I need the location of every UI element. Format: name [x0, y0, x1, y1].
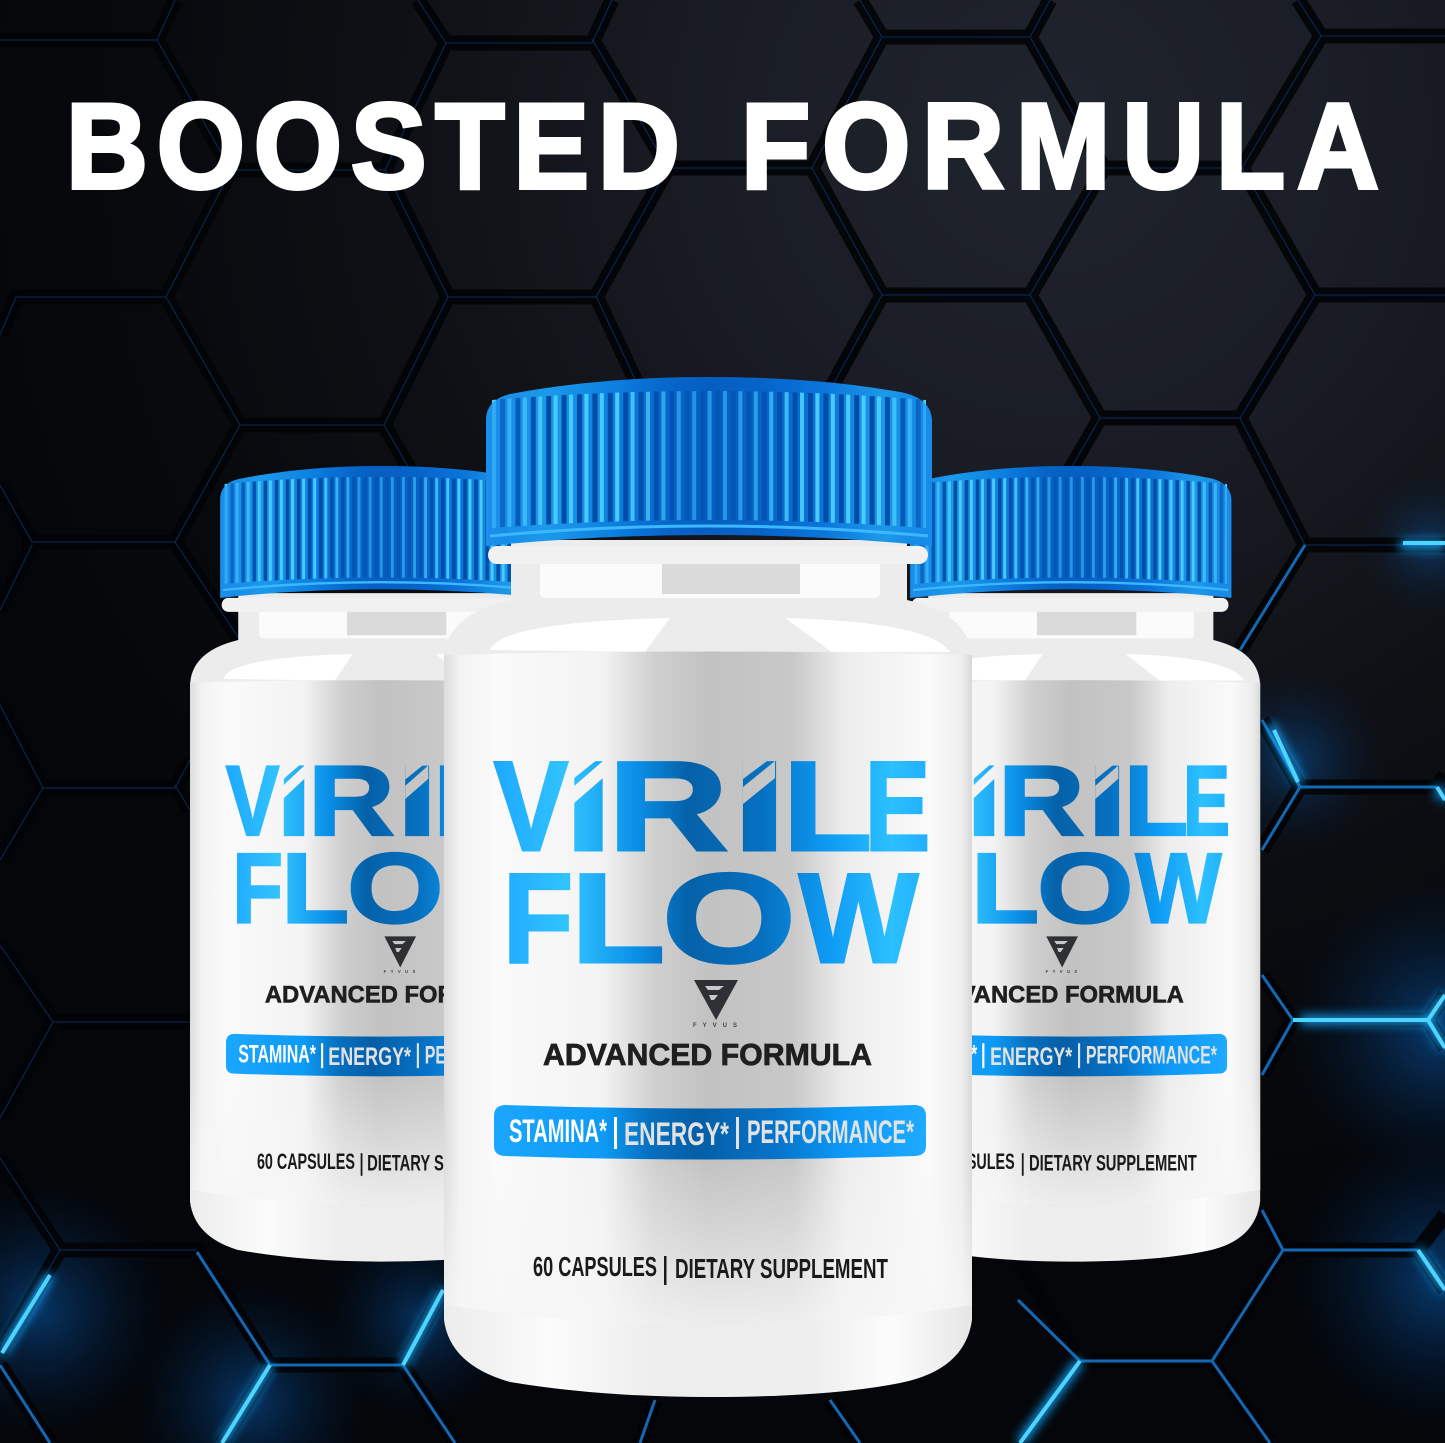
bottle: left, rear: [190, 466, 570, 1262]
benefit bar: [899, 1034, 1227, 1076]
label: [880, 680, 1260, 1205]
bottle body: [190, 680, 570, 1262]
brand name: L: [783, 735, 872, 877]
benefit bar: ENERGY*: [624, 1116, 729, 1152]
brand name: F: [503, 847, 573, 989]
fyvus logo: [1046, 936, 1082, 974]
benefit bar: STAMINA*: [509, 1113, 607, 1149]
brand name: [494, 735, 930, 989]
brand name: I: [967, 747, 1001, 857]
neon bright edges: [2, 543, 1445, 1443]
capacity line: 60 CAPSULES: [917, 1150, 1015, 1174]
capacity line: DIETARY SUPPLEMENT: [367, 1152, 535, 1176]
fyvus logo: FYVUS: [384, 969, 420, 974]
brand name: V: [916, 747, 969, 857]
neck and shoulder: [880, 593, 1260, 687]
brand name: W: [799, 847, 918, 989]
brand name: L: [434, 747, 498, 857]
bottle body: [444, 652, 972, 1397]
bottle body: [880, 680, 1260, 1262]
benefit bar: STAMINA*: [238, 1041, 316, 1069]
brand name: I: [397, 747, 437, 857]
brand name: O: [347, 834, 443, 944]
cap: [220, 466, 541, 598]
title: BOOSTED FORMULA: BOOSTED: [66, 77, 680, 214]
capacity line: [257, 1150, 535, 1176]
brand name: W: [446, 834, 531, 944]
brand name: I: [1087, 747, 1127, 857]
title: BOOSTED FORMULA: FORMULA: [741, 77, 1379, 214]
fyvus logo: [693, 980, 743, 1029]
brand name: O: [1037, 834, 1133, 944]
capacity line: [533, 1251, 888, 1285]
benefit bar: ENERGY*: [328, 1043, 412, 1071]
benefit bar: PERFORMANCE*: [425, 1042, 556, 1070]
brand name: R: [608, 735, 728, 877]
capacity line: DIETARY SUPPLEMENT: [1029, 1152, 1197, 1176]
capacity line: 60 CAPSULES: [257, 1150, 355, 1174]
neck and shoulder: [444, 540, 972, 660]
glowing medium edges: [0, 545, 1437, 1443]
capacity line: 60 CAPSULES: [533, 1251, 657, 1282]
fyvus logo: [384, 936, 420, 974]
subtitle: ADVANCED FORMULA: [543, 1037, 872, 1072]
benefit bar: [494, 1105, 926, 1160]
brand name: R: [998, 747, 1084, 857]
capacity line: DIETARY SUPPLEMENT: [675, 1253, 888, 1284]
benefit bar: PERFORMANCE*: [1086, 1042, 1217, 1070]
subtitle: ADVANCED FORMULA: [925, 981, 1184, 1008]
neon glow halo: [2, 545, 1445, 1443]
neck and shoulder: [190, 593, 570, 687]
fyvus logo: FYVUS: [693, 1023, 743, 1029]
brand name: E: [1183, 747, 1230, 857]
brand name: V: [226, 747, 279, 857]
benefit bar: STAMINA*: [899, 1041, 978, 1069]
capacity line: [917, 1150, 1197, 1176]
subtitle: ADVANCED FORMULA: [265, 981, 524, 1008]
brand name: I: [277, 747, 311, 857]
cap: [910, 466, 1231, 598]
brand name: [226, 747, 540, 944]
label: [444, 652, 972, 1325]
benefit bar: [226, 1034, 556, 1076]
brand name: L: [281, 834, 349, 944]
brand name: W: [1136, 834, 1221, 944]
brand name: I: [565, 735, 612, 877]
brand name: L: [1124, 747, 1188, 857]
benefit bar: PERFORMANCE*: [747, 1114, 914, 1150]
bottle: centre, front: [444, 377, 972, 1397]
brand name: F: [922, 834, 973, 944]
cap: [486, 377, 932, 546]
brand name: R: [308, 747, 394, 857]
brand name: I: [732, 735, 787, 877]
brand name: E: [493, 747, 540, 857]
brand name: L: [971, 834, 1039, 944]
brand name: E: [865, 735, 930, 877]
brand name: L: [571, 847, 665, 989]
bottle: right, rear: [880, 466, 1260, 1262]
label: [190, 680, 570, 1205]
brand name: O: [662, 847, 796, 989]
brand name: [916, 747, 1230, 944]
title: BOOSTED FORMULA: [66, 77, 1379, 214]
brand name: V: [494, 735, 568, 877]
benefit bar: ENERGY*: [990, 1043, 1073, 1071]
fyvus logo: FYVUS: [1046, 969, 1082, 974]
brand name: F: [232, 834, 283, 944]
